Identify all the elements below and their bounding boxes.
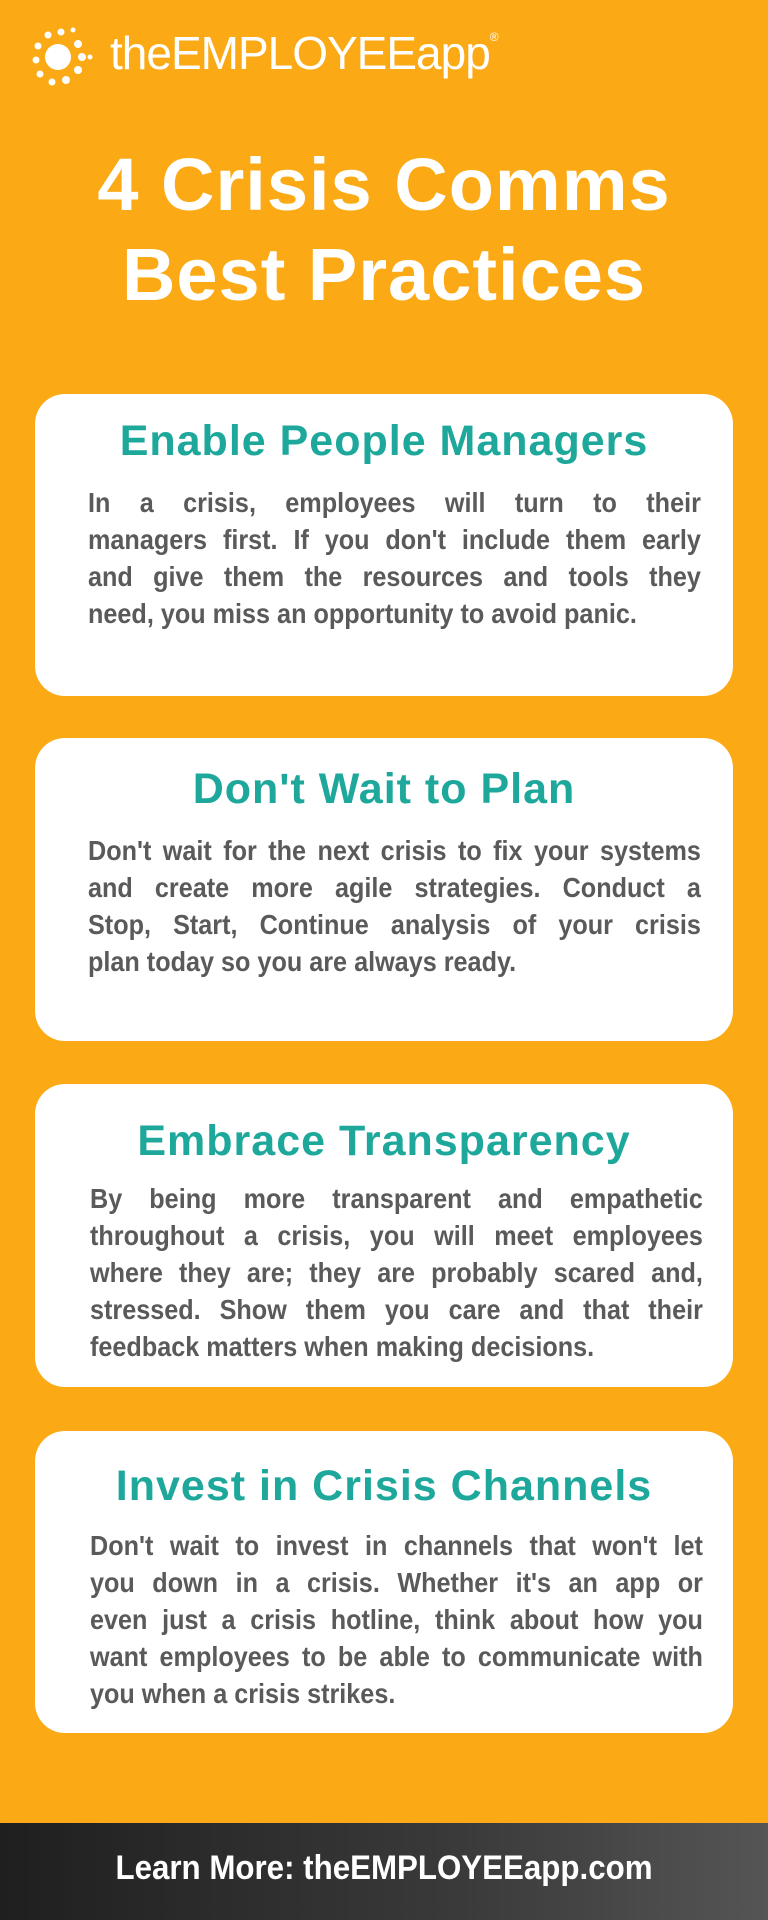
body text: Don't wait for the next crisis to fix your systems (88, 835, 701, 866)
heading: Invest in Crisis Channels (116, 1462, 652, 1510)
body text: Stop, Start, Continue analysis of your crisis (88, 909, 701, 940)
panel: embrace transparency (35, 1084, 733, 1387)
body text (88, 487, 701, 629)
logo text: theEMPLOYEEapp® (110, 27, 498, 79)
body text: By being more transparent and empathetic (90, 1183, 703, 1214)
body text: throughout a crisis, you will meet employees (90, 1220, 703, 1251)
body text: managers first. If you don't include them early (88, 524, 701, 555)
body text: and create more agile strategies. Conduct a (88, 872, 701, 903)
body text: Don't wait to invest in channels that won't let (90, 1530, 703, 1561)
footer text: Learn More: theEMPLOYEEapp.com (115, 1849, 653, 1887)
body text (88, 835, 702, 977)
body text: you down in a crisis. Whether it's an app or (90, 1567, 703, 1598)
body text: need, you miss an opportunity to avoid panic. (88, 598, 637, 629)
heading: Don't Wait to Plan (193, 765, 575, 813)
panel: don't wait to plan (35, 738, 733, 1041)
heading: Embrace Transparency (137, 1117, 631, 1165)
title (97, 143, 671, 316)
panel: enable people managers (35, 394, 733, 696)
body text: want employees to be able to communicate with (90, 1641, 703, 1672)
body text: plan today so you are always ready. (88, 946, 516, 977)
logo (32, 27, 498, 86)
title: Best Practices (122, 233, 646, 316)
body text: where they are; they are probably scared and, (90, 1257, 703, 1288)
panel: invest in crisis channels (35, 1431, 733, 1733)
icon: dot circle (32, 28, 92, 86)
body text: feedback matters when making decisions. (90, 1331, 594, 1362)
heading: Enable People Managers (120, 417, 648, 465)
body text: and give them the resources and tools they (88, 561, 701, 592)
body text: stressed. Show them you care and that their (90, 1294, 703, 1325)
footer (0, 1823, 768, 1920)
body text (90, 1183, 703, 1362)
body text: you when a crisis strikes. (90, 1678, 395, 1709)
body text: even just a crisis hotline, think about how you (90, 1604, 703, 1635)
title: 4 Crisis Comms (97, 143, 671, 226)
body text (90, 1530, 703, 1709)
body text: In a crisis, employees will turn to their (88, 487, 701, 518)
